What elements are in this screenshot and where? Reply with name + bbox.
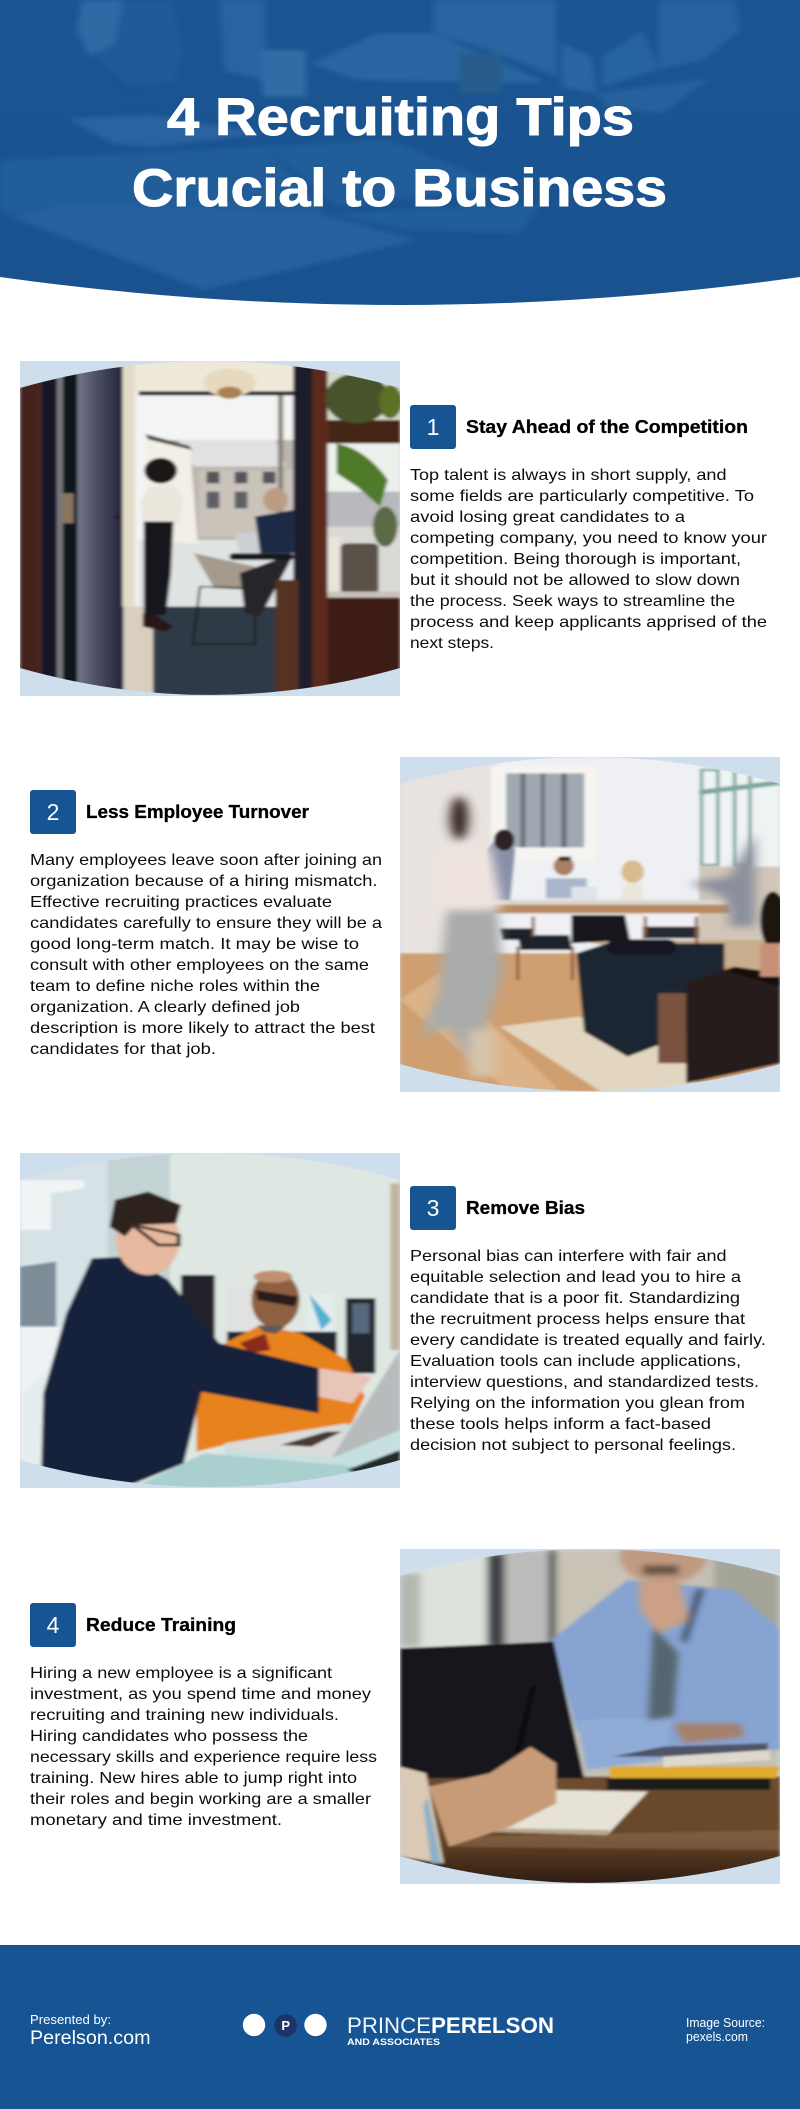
body text: interview questions, and standardized tests. (410, 1374, 759, 1391)
body text: organization because of a hiring mismatch. (30, 873, 378, 890)
body text (410, 1248, 766, 1454)
body text: decision not subject to personal feelings. (410, 1437, 736, 1454)
body text: the recruitment process helps ensure that (410, 1311, 746, 1328)
body text: Hiring candidates who possess the (30, 1728, 308, 1745)
panel: tip 1 photo, meeting room seen through a door (20, 361, 402, 696)
body text: team to define niche roles within the (30, 978, 320, 995)
body text: some fields are particularly competitive. To (410, 488, 754, 505)
body text: recruiting and training new individuals. (30, 1707, 339, 1724)
body text: Evaluation tools can include applications, (410, 1353, 741, 1370)
body text: organization. A clearly defined job (30, 999, 300, 1016)
heading: remove bias: Remove Bias (466, 1197, 585, 1218)
title: Crucial to Business (132, 159, 667, 218)
body text: Top talent is always in short supply, and (410, 467, 726, 484)
panel: tip 2 text (30, 790, 382, 1058)
body text: Effective recruiting practices evaluate (30, 894, 332, 911)
body text: good long-term match. It may be wise to (30, 936, 359, 953)
body text: but it should not be allowed to slow down (410, 572, 740, 589)
footer band (0, 1945, 800, 2109)
number badge 2 (30, 790, 76, 834)
body text: Many employees leave soon after joining an (30, 852, 382, 869)
body text (30, 852, 382, 1058)
body text: their roles and begin working are a smaller (30, 1791, 372, 1808)
number badge 4 (30, 1603, 76, 1647)
body text: training. New hires able to jump right into (30, 1770, 357, 1787)
number badge 3 (410, 1186, 456, 1230)
panel: tip 3 text (410, 1186, 766, 1454)
body text: next steps. (410, 635, 494, 652)
panel: tip 1 text (410, 405, 768, 652)
presented by credit: Perelson.com (30, 2027, 150, 2049)
number badge 2: 2 (47, 799, 59, 825)
title: 4 Recruiting Tips (167, 88, 634, 147)
panel: tip 4 text (30, 1603, 377, 1829)
body text: Hiring a new employee is a significant (30, 1665, 333, 1682)
company logo: PERELSON (431, 2013, 554, 2038)
body text: Personal bias can interfere with fair and (410, 1248, 726, 1265)
body text: candidates for that job. (30, 1041, 216, 1058)
company logo: AND ASSOCIATES (347, 2037, 440, 2047)
body text: candidates carefully to ensure they will be a (30, 915, 382, 932)
company logo: P (281, 2018, 290, 2033)
company logo (243, 2013, 554, 2047)
title (132, 88, 667, 218)
body text: avoid losing great candidates to a (410, 509, 685, 526)
body text: these tools helps inform a fact-based (410, 1416, 711, 1433)
body text: every candidate is treated equally and fairly. (410, 1332, 766, 1349)
image source credit: Image Source: (686, 2016, 765, 2030)
body text: monetary and time investment. (30, 1812, 282, 1829)
number badge 1 (410, 405, 456, 449)
body text: necessary skills and experience require less (30, 1749, 377, 1766)
body text: the process. Seek ways to streamline the (410, 593, 735, 610)
body text: consult with other employees on the same (30, 957, 369, 974)
heading: reduce training: Reduce Training (86, 1614, 236, 1635)
body text: process and keep applicants apprised of the (410, 614, 767, 631)
panel: tip 3 photo, two men at a laptop (20, 1153, 400, 1488)
image source credit: pexels.com (686, 2030, 748, 2044)
presented by credit: Presented by: (30, 2012, 111, 2027)
panel: tip 4 photo, interview across a table (400, 1530, 780, 1884)
number badge 4: 4 (47, 1612, 60, 1638)
presented by credit (30, 2012, 150, 2049)
body text: competition. Being thorough is important, (410, 551, 741, 568)
number badge 3: 3 (427, 1195, 439, 1221)
body text: competing company, you need to know your (410, 530, 768, 547)
body text: Relying on the information you glean from (410, 1395, 745, 1412)
image source credit (686, 2016, 765, 2044)
body text: equitable selection and lead you to hire a (410, 1269, 741, 1286)
panel: tip 2 photo, open office with blurred walkers (400, 757, 786, 1092)
body text (30, 1665, 377, 1829)
body text: candidate that is a poor fit. Standardizing (410, 1290, 740, 1307)
company logo: PRINCE (347, 2013, 431, 2038)
number badge 1: 1 (427, 414, 439, 440)
header banner (0, 0, 800, 305)
body text (410, 467, 768, 652)
heading: less employee turnover: Less Employee Turnover (86, 801, 309, 822)
body text: investment, as you spend time and money (30, 1686, 371, 1703)
heading: stay ahead of the competition: Stay Ahead of the Competition (466, 416, 748, 437)
body text: description is more likely to attract the best (30, 1020, 376, 1037)
